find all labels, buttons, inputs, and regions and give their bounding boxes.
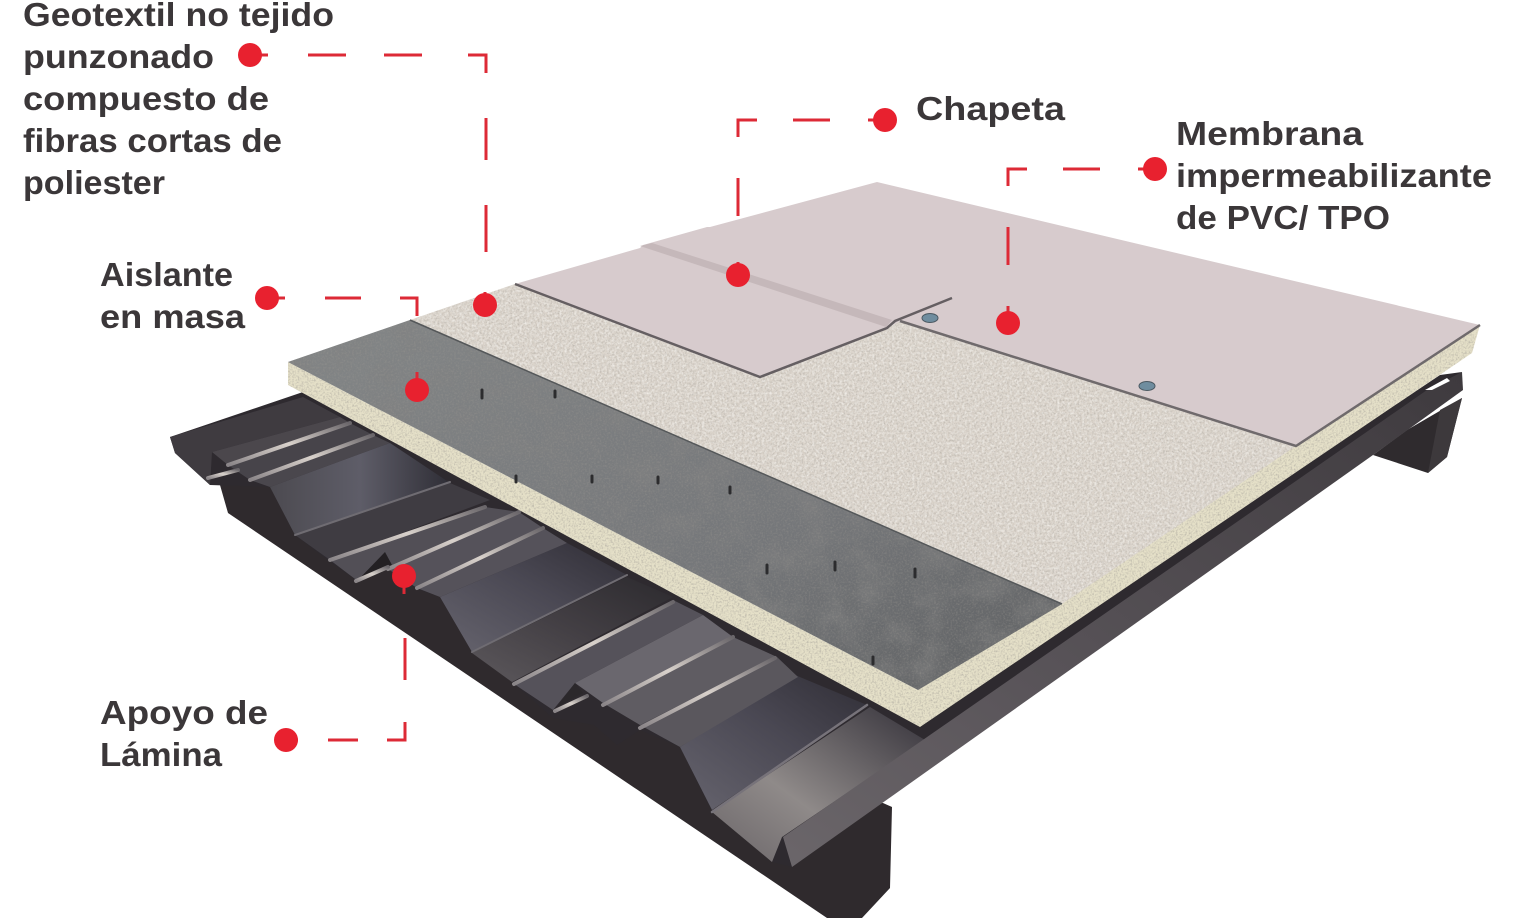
leader line: Aislante [255, 286, 429, 402]
label: Apoyo: Lámina [100, 736, 223, 773]
label: Geotextil: compuesto de [23, 80, 269, 117]
fixing washers [922, 314, 1155, 390]
label: Apoyo: Apoyo de [100, 694, 268, 731]
callout: Geotextil [23, 0, 497, 317]
label: Aislante: Aislante [100, 256, 233, 293]
label: Chapeta: Chapeta [916, 90, 1066, 127]
leader line: Membrana [996, 157, 1167, 335]
label: Aislante: en masa [100, 298, 246, 335]
label: Membrana: de PVC/ TPO [1176, 199, 1390, 236]
metal deck sheet [170, 372, 1463, 867]
far support beam [1373, 398, 1462, 473]
label: Geotextil: poliester [23, 164, 165, 201]
label: Aislante [100, 256, 246, 335]
leader line: Geotextil [238, 43, 497, 317]
chapeta strip [640, 243, 892, 327]
waterproof membrane [515, 182, 1480, 446]
near support beam [220, 480, 892, 918]
callout: Chapeta [726, 90, 1066, 287]
label: Membrana: Membrana [1176, 115, 1364, 152]
geotextile layer [410, 284, 1296, 604]
diagram: roof build-up [170, 182, 1480, 918]
fastener marks [482, 390, 915, 664]
end flange [783, 372, 1463, 867]
leader line: Apoyo [274, 564, 416, 752]
label: Membrana: impermeabilizante [1176, 157, 1492, 194]
callout: Membrana [996, 115, 1492, 335]
label: Geotextil: fibras cortas de [23, 122, 282, 159]
callout: Aislante [100, 256, 429, 402]
callout: Apoyo [100, 564, 416, 773]
grey facing layer [288, 320, 1062, 690]
label: Membrana [1176, 115, 1492, 236]
label: Geotextil [23, 0, 334, 201]
label: Geotextil: punzonado [23, 38, 214, 75]
leader line: Chapeta [726, 108, 897, 287]
insulation board side [288, 325, 1480, 727]
label: Apoyo [100, 694, 268, 773]
